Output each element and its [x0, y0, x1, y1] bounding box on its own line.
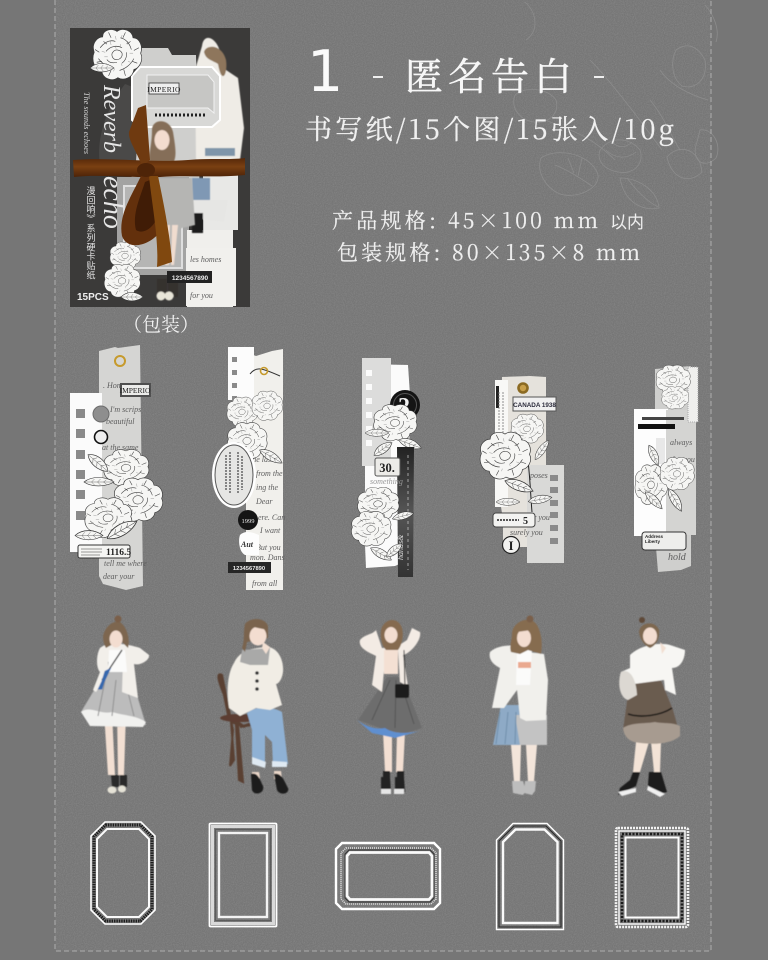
sticker 5: always: [670, 438, 692, 447]
sticker 2: 1234567890: [233, 566, 265, 572]
count label: 15PCS: [77, 292, 109, 303]
girl 3: grey skirt with blue lining, bag: [357, 620, 422, 794]
sticker 2: mon. Dans: [250, 553, 285, 562]
printed note paper: 1234567890: [172, 275, 208, 282]
girl 1: grey skirt: [81, 616, 149, 794]
printed note paper: for you: [190, 291, 213, 300]
sticker 1: tell me where: [104, 559, 147, 568]
sticker 4: poses: [529, 471, 548, 480]
sticker 1: at the same: [102, 443, 139, 452]
sticker 3: [351, 358, 423, 577]
sticker 2: But you: [256, 543, 281, 552]
title number: 1: [307, 39, 343, 105]
sticker 2: 1999: [242, 518, 254, 525]
sticker 4: 5: [523, 516, 528, 527]
row: five white label frames: [91, 822, 688, 930]
sticker 1: IMPERIO: [120, 386, 151, 395]
frame 1: octagon: [91, 822, 155, 924]
sticker 3: 2: [398, 394, 410, 420]
orange-brown ribbon and bow: [73, 105, 245, 267]
sticker 2: ere. Can: [258, 513, 285, 522]
sticker 2: I want: [259, 526, 281, 535]
printed note paper: les homes: [190, 255, 221, 264]
sticker 1: [70, 345, 163, 590]
sticker 1: beautiful: [106, 417, 135, 426]
printed note paper: [167, 248, 236, 306]
faint floral line art behind header: [514, 2, 718, 209]
sticker 3: hands&: [396, 534, 405, 560]
sticker 5: hold: [668, 552, 687, 563]
girl on package, centre: [149, 121, 195, 300]
row: five flower collage stickers: [70, 345, 698, 590]
package script title: echo: [97, 176, 128, 229]
sticker 4: I: [508, 538, 514, 553]
girl 2: seated on chair: [218, 619, 288, 794]
sticker 5: Liberty: [645, 539, 661, 544]
sticker 2: [212, 347, 285, 590]
specification lines: [332, 205, 644, 267]
sticker 2: Aut: [240, 540, 254, 549]
sticker 4: for you: [527, 513, 550, 522]
size note: 以内: [610, 208, 644, 233]
sticker 5: for you: [672, 455, 695, 464]
frame 2: rectangle: [210, 824, 276, 926]
sticker 1: . Home,: [103, 381, 128, 390]
sticker 4: CANADA 1938: [513, 402, 556, 409]
sticker 1: I'm scrips: [109, 405, 141, 414]
sticker 3: something: [370, 477, 403, 486]
girl 4: long hair, blue skirt: [490, 616, 548, 795]
torn paper layers: [99, 48, 238, 307]
sticker 4: [480, 376, 564, 563]
girl 5: brown layered skirt: [618, 617, 685, 797]
sticker 2: from all: [252, 579, 278, 588]
product size: 产品规格: 45×100 mm: [332, 205, 598, 235]
sticker 4: surely you: [510, 528, 543, 537]
sticker 2: from the: [256, 469, 283, 478]
sticker 2: ing the: [256, 483, 278, 492]
decorative frame label EMPERIO: [132, 67, 220, 127]
package script title: [82, 84, 128, 229]
caption: package: （包装）: [123, 310, 199, 337]
girl on package, right: [188, 38, 244, 233]
package size: 包装规格: 80×135×8 mm: [337, 237, 640, 267]
frame 4: tag shape: [496, 824, 564, 930]
sticker 3: 30.: [379, 461, 395, 475]
frame 3: wide rectangle with notched corners: [336, 843, 440, 909]
package script title: Reverb: [98, 84, 124, 153]
subtitle: material and counts: 书写纸/15个图/15张入/10g: [305, 108, 674, 147]
row: five girl stickers: [81, 616, 685, 797]
title: 匿名告白: [405, 46, 577, 101]
sticker 2: the last: [250, 455, 274, 464]
sticker 1: dear your: [103, 572, 135, 581]
white peonies on package: [90, 29, 143, 301]
sticker 2: Dear: [255, 497, 273, 506]
sticker 5: [634, 365, 698, 572]
package script title: The sounds echoes: [82, 92, 91, 154]
package backing card: [70, 28, 250, 307]
frame 5: dotted rectangle: [616, 828, 688, 927]
vertical series name: 漫回响》系列硬卡贴纸: [84, 185, 98, 281]
panel: product package photo: [70, 28, 250, 307]
sticker 5: Address: [645, 534, 664, 539]
decorative frame label EMPERIO: IMPERIO: [147, 85, 181, 94]
sticker 1: 1116.5: [106, 548, 131, 558]
